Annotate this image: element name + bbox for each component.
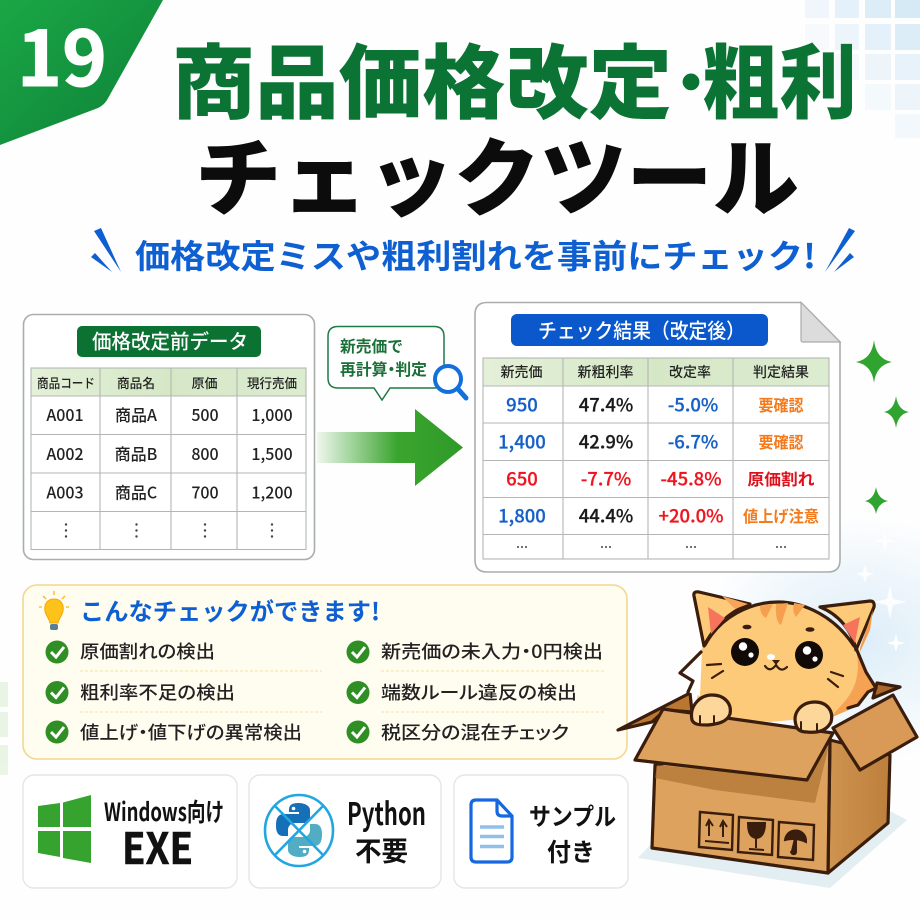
table: before-revision: 現行売価 — [247, 373, 297, 392]
icon: Windows logo — [38, 795, 91, 863]
speech bubble: recalculation — [328, 326, 444, 400]
number badge 19: 19 — [17, 0, 107, 108]
label: EXE: EXE — [122, 815, 193, 877]
checklist item: 税区分の混在チェック — [381, 719, 569, 745]
panel: before-revision data — [24, 314, 314, 560]
panel: feature checklist — [23, 585, 627, 759]
table: results: 新売価 — [500, 362, 542, 382]
table: results: 42.9% — [579, 428, 633, 454]
table: results: 新粗利率 — [578, 362, 634, 382]
cat body and head — [680, 601, 876, 722]
table: results: 950 — [506, 392, 538, 418]
cat stripes — [760, 603, 805, 625]
box inner shadow — [655, 745, 829, 803]
table: results: +20.0% — [658, 502, 724, 528]
table: before-revision: A003 — [46, 480, 84, 504]
divider lines — [80, 671, 605, 712]
table: before-revision: 1,200 — [251, 480, 293, 504]
heading: check results: チェック結果（改定後） — [538, 314, 745, 344]
table: results: 要確認 — [758, 392, 804, 416]
table: before-revision: 商品A — [115, 402, 157, 426]
card: Python not required — [249, 775, 441, 888]
table: results: 1,800 — [498, 502, 546, 528]
cat nose and mouth — [765, 654, 787, 670]
table: before-revision: 商品名 — [117, 373, 155, 392]
label: included: 付き — [547, 833, 595, 869]
icon: Python crossed out — [265, 795, 333, 866]
title line 1: 商品価格改定 — [172, 19, 672, 136]
box right side and front — [652, 735, 890, 873]
table: before-revision: 商品C — [115, 480, 157, 504]
table: results: 44.4% — [579, 502, 633, 528]
label: Python: Python — [347, 789, 426, 834]
subtitle with accent marks: 価格改定ミスや粗利割れを事前にチェック! — [135, 230, 816, 278]
card: Windows EXE — [23, 775, 237, 888]
table: results: 値上げ注意 — [743, 503, 819, 527]
number badge 19 — [0, 0, 163, 145]
arrow — [317, 409, 463, 486]
panel: check results — [475, 302, 840, 572]
label: not required: 不要 — [355, 830, 408, 869]
cat paws — [692, 695, 832, 732]
icon: green sparkles — [856, 340, 909, 514]
table: before-revision: A001 — [46, 402, 84, 426]
table: before-revision: 商品B — [115, 441, 157, 465]
cat whiskers — [707, 664, 843, 687]
checklist item: 端数ルール違反の検出 — [381, 679, 577, 705]
box handling marks — [699, 812, 814, 860]
table: results: -5.0% — [668, 392, 718, 418]
checklist item: 新売価の未入力・0円検出 — [381, 638, 603, 664]
label: Windows: Windows向け — [104, 793, 224, 829]
table: results — [483, 358, 829, 559]
label: sample: サンプル — [529, 797, 616, 832]
table: before-revision: 500 — [191, 402, 219, 426]
table: results: -7.7% — [581, 466, 631, 492]
table: results: 改定率 — [669, 362, 711, 382]
table: before-revision — [31, 368, 306, 550]
heading: checklist: こんなチェックができます! — [80, 592, 380, 627]
icon: folded corner — [801, 302, 840, 342]
table: results: 判定結果 — [753, 362, 809, 382]
cat eyes — [731, 625, 823, 669]
cat ears — [694, 592, 874, 652]
table: before-revision: A002 — [46, 441, 84, 465]
card: sample included — [454, 775, 628, 888]
icon: light bulb — [39, 591, 69, 630]
heading: before-revision data: 価格改定前データ — [92, 326, 248, 354]
box shadow — [638, 810, 907, 888]
table: results: -6.7% — [668, 428, 718, 454]
table: before-revision: 1,000 — [251, 402, 293, 426]
table: before-revision: 原価 — [192, 373, 218, 392]
title line 2: チェックツール — [195, 111, 799, 234]
checklist item: 粗利率不足の検出 — [80, 679, 235, 705]
box back flaps — [618, 683, 900, 730]
table: results: 原価割れ — [748, 466, 814, 490]
table: before-revision: 700 — [191, 480, 219, 504]
box flaps — [635, 695, 917, 780]
icon: document — [471, 800, 512, 862]
title line 1: 粗利 — [702, 19, 857, 136]
table: results: 650 — [506, 466, 538, 492]
title line 1: ・ — [661, 36, 721, 123]
table: before-revision: 商品コード — [37, 373, 95, 392]
table: before-revision: 1,500 — [251, 441, 293, 465]
illustration: cat in a box — [618, 592, 917, 888]
table: before-revision: 800 — [191, 441, 219, 465]
checklist item: 原価割れの検出 — [80, 638, 215, 664]
checklist item: 値上げ・値下げの異常検出 — [80, 719, 302, 745]
table: results: 47.4% — [579, 392, 633, 418]
table: results: -45.8% — [660, 466, 722, 492]
table: results: 1,400 — [498, 428, 546, 454]
icon: magnifier — [435, 366, 466, 398]
table: results: 要確認 — [758, 429, 804, 453]
speech bubble: recalculation: 新売価で — [340, 333, 403, 357]
speech bubble: recalculation: 再計算・判定 — [340, 356, 427, 380]
